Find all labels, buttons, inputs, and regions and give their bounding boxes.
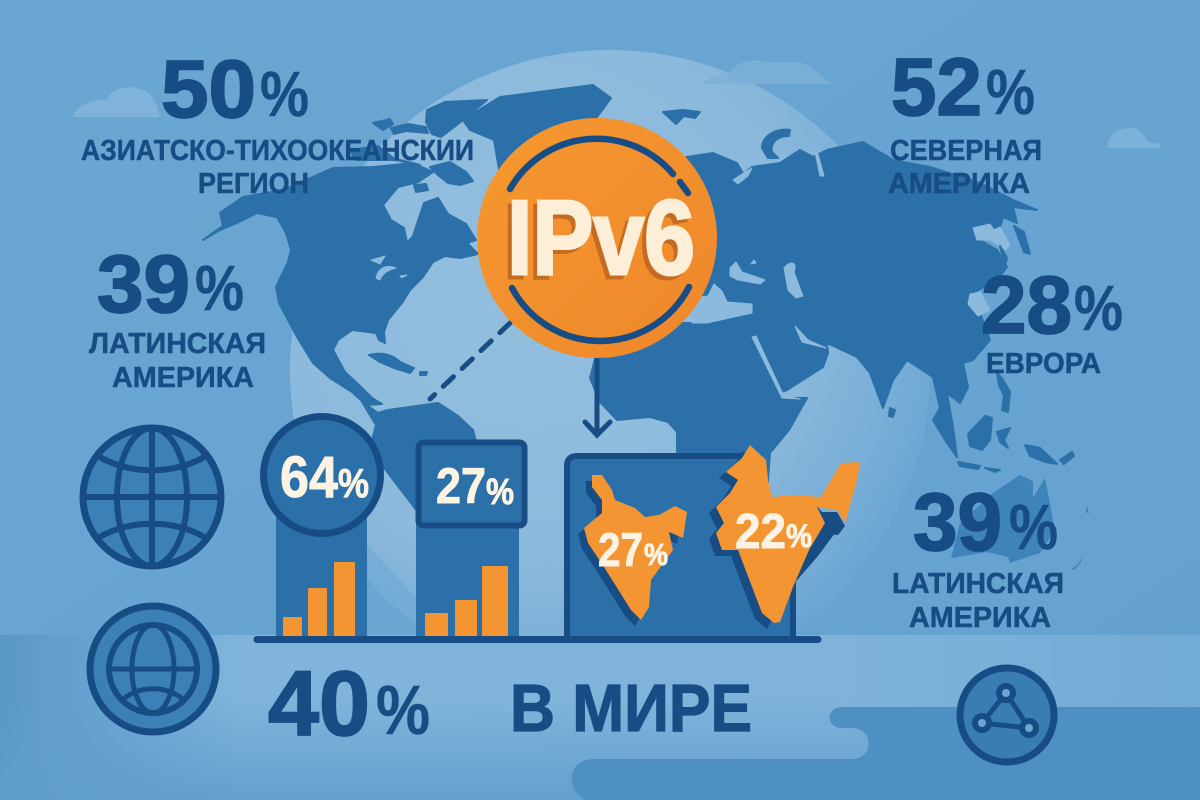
australia [951, 475, 1055, 563]
globe disc [290, 50, 930, 690]
stat: latin america right: 39 [913, 477, 1002, 568]
stat: asia pacific [81, 44, 474, 200]
stat: latin america left: АМЕРИКА [112, 362, 254, 394]
stat: world 40: 40 [268, 653, 370, 755]
stat: asia pacific: РЕГИОН [198, 168, 309, 200]
bottom fade [0, 700, 1200, 800]
india 27 [578, 475, 687, 626]
bars [425, 566, 508, 637]
badge 64 [264, 416, 380, 534]
south atlantic tint [367, 545, 416, 635]
india 27: 27 [598, 523, 643, 576]
stat: north america: СЕВЕРНАЯ [890, 135, 1042, 167]
south america [362, 402, 477, 515]
stat: north america: АМЕРИКА [888, 168, 1030, 200]
cuba and caribbean [369, 354, 427, 375]
stat: latin america left: % [195, 252, 244, 324]
great lakes [371, 256, 407, 280]
world map [203, 85, 1089, 635]
stat: world 40: % [376, 671, 430, 749]
india 22: 22 [735, 505, 786, 559]
stat: latin america left: 39 [97, 239, 190, 330]
seas [690, 152, 1010, 348]
badge text: IPv6 [507, 179, 695, 297]
panel body [567, 456, 796, 637]
icon: globe small [90, 606, 216, 732]
bottom band [0, 635, 1200, 800]
value 64: % [338, 460, 369, 506]
stat: europe: 28 [981, 260, 1072, 351]
stat: latin america left [89, 239, 266, 394]
dashed connector [430, 323, 510, 399]
stat: latin america right: LАТИНСКАЯ [892, 568, 1064, 600]
value 64: 64 [280, 445, 338, 510]
icon: globe large [83, 428, 221, 566]
badge text shadow: IPv6 [503, 183, 691, 301]
new zealand [1071, 505, 1089, 570]
stat: north america: 52 [891, 42, 982, 133]
cloud over globe [703, 60, 833, 84]
stat: latin america right: % [1009, 491, 1058, 563]
india 22 [709, 445, 860, 629]
baseline [257, 636, 818, 643]
india 27: % [644, 537, 668, 572]
stat: europe: % [1074, 272, 1123, 344]
icon: network [960, 668, 1054, 762]
stat: latin america left: ЛАТИНСКАЯ [89, 328, 266, 360]
africa [590, 313, 807, 520]
stat: europe: ЕВРОРА [986, 348, 1101, 380]
bars [283, 562, 355, 637]
stat: asia pacific: АЗИАТСКО-ТИХООКЕАНСКИИ [81, 135, 474, 167]
stat: north america: % [986, 56, 1035, 128]
stat: latin america right: АМЕРИКА [909, 602, 1051, 634]
stat: asia pacific: % [260, 58, 309, 130]
label: world: В МИРЕ [510, 671, 752, 746]
badge disc [477, 118, 717, 358]
value 27: 27 [436, 458, 486, 514]
arrow down [585, 355, 610, 435]
box 27 [418, 442, 524, 526]
decorative clouds [72, 87, 1160, 148]
badge arcs [510, 139, 689, 341]
stat: north america [888, 42, 1042, 200]
bottom right shape [572, 707, 1200, 800]
eurasia [660, 142, 1037, 457]
asian islands [889, 226, 1074, 472]
small northern islands [663, 110, 790, 158]
stat: latin america right [892, 477, 1064, 634]
panel: column 27 [416, 442, 524, 637]
arctic islands [350, 85, 611, 192]
panel: india maps [567, 445, 860, 637]
north america [203, 163, 478, 405]
stat: europe [981, 260, 1123, 380]
value 27: % [486, 471, 514, 512]
ipv6 badge [477, 118, 717, 358]
stat: world 40 [268, 653, 430, 755]
india 22: % [786, 518, 812, 554]
stat: asia pacific: 50 [161, 44, 256, 135]
panel: column 64 [264, 416, 380, 637]
